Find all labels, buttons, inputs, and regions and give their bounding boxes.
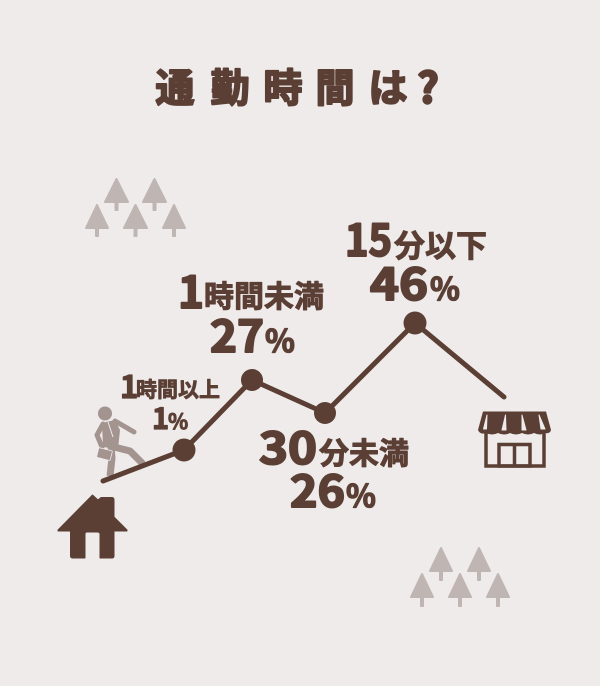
label: under 1 hour 27%: %: [265, 316, 295, 361]
label: 15 minutes or less 46%: %: [430, 264, 460, 309]
label: 1 hour or more 1%: 時間以上: [136, 374, 220, 404]
title: ?: [417, 55, 439, 116]
icon: trees top left: [86, 179, 185, 236]
data point: under 1 hour: [241, 369, 263, 391]
data point: under 30 minutes: [314, 402, 336, 424]
label: under 1 hour 27%: [178, 257, 324, 365]
data point: under 15 minutes: [404, 312, 426, 334]
label: 1 hour or more 1%: [120, 362, 220, 438]
title: 時: [263, 58, 303, 114]
title: [155, 55, 439, 116]
label: under 1 hour 27%: 時間未満: [204, 272, 324, 316]
label: 1 hour or more 1%: 1: [120, 362, 138, 407]
line chart path: [103, 312, 504, 481]
title: 勤: [210, 58, 250, 114]
label: under 30 minutes 26%: 分未満: [319, 429, 409, 473]
label: under 30 minutes 26%: 26: [290, 456, 345, 520]
label: 15 minutes or less 46%: 分以下: [394, 221, 487, 266]
label: under 30 minutes 26%: [259, 413, 409, 520]
label: under 30 minutes 26%: 30: [259, 413, 317, 477]
icon: trees bottom right: [411, 548, 509, 606]
label: 1 hour or more 1%: %: [168, 406, 188, 436]
label: 15 minutes or less 46%: 46: [370, 249, 428, 313]
title: は: [368, 58, 408, 114]
title: 通: [155, 58, 195, 114]
label: 1 hour or more 1%: 1: [152, 396, 169, 438]
icon: walking commuter: [96, 406, 143, 476]
label: under 1 hour 27%: 1: [178, 257, 204, 321]
icon: store: [478, 412, 551, 466]
data point: 1 hour or more: [172, 438, 196, 462]
label: 15 minutes or less 46%: 15: [345, 205, 392, 269]
label: 15 minutes or less 46%: [345, 205, 487, 313]
title: 間: [315, 58, 355, 114]
icon: house: [58, 495, 127, 558]
label: under 30 minutes 26%: %: [346, 471, 376, 516]
label: under 1 hour 27%: 27: [210, 301, 264, 365]
